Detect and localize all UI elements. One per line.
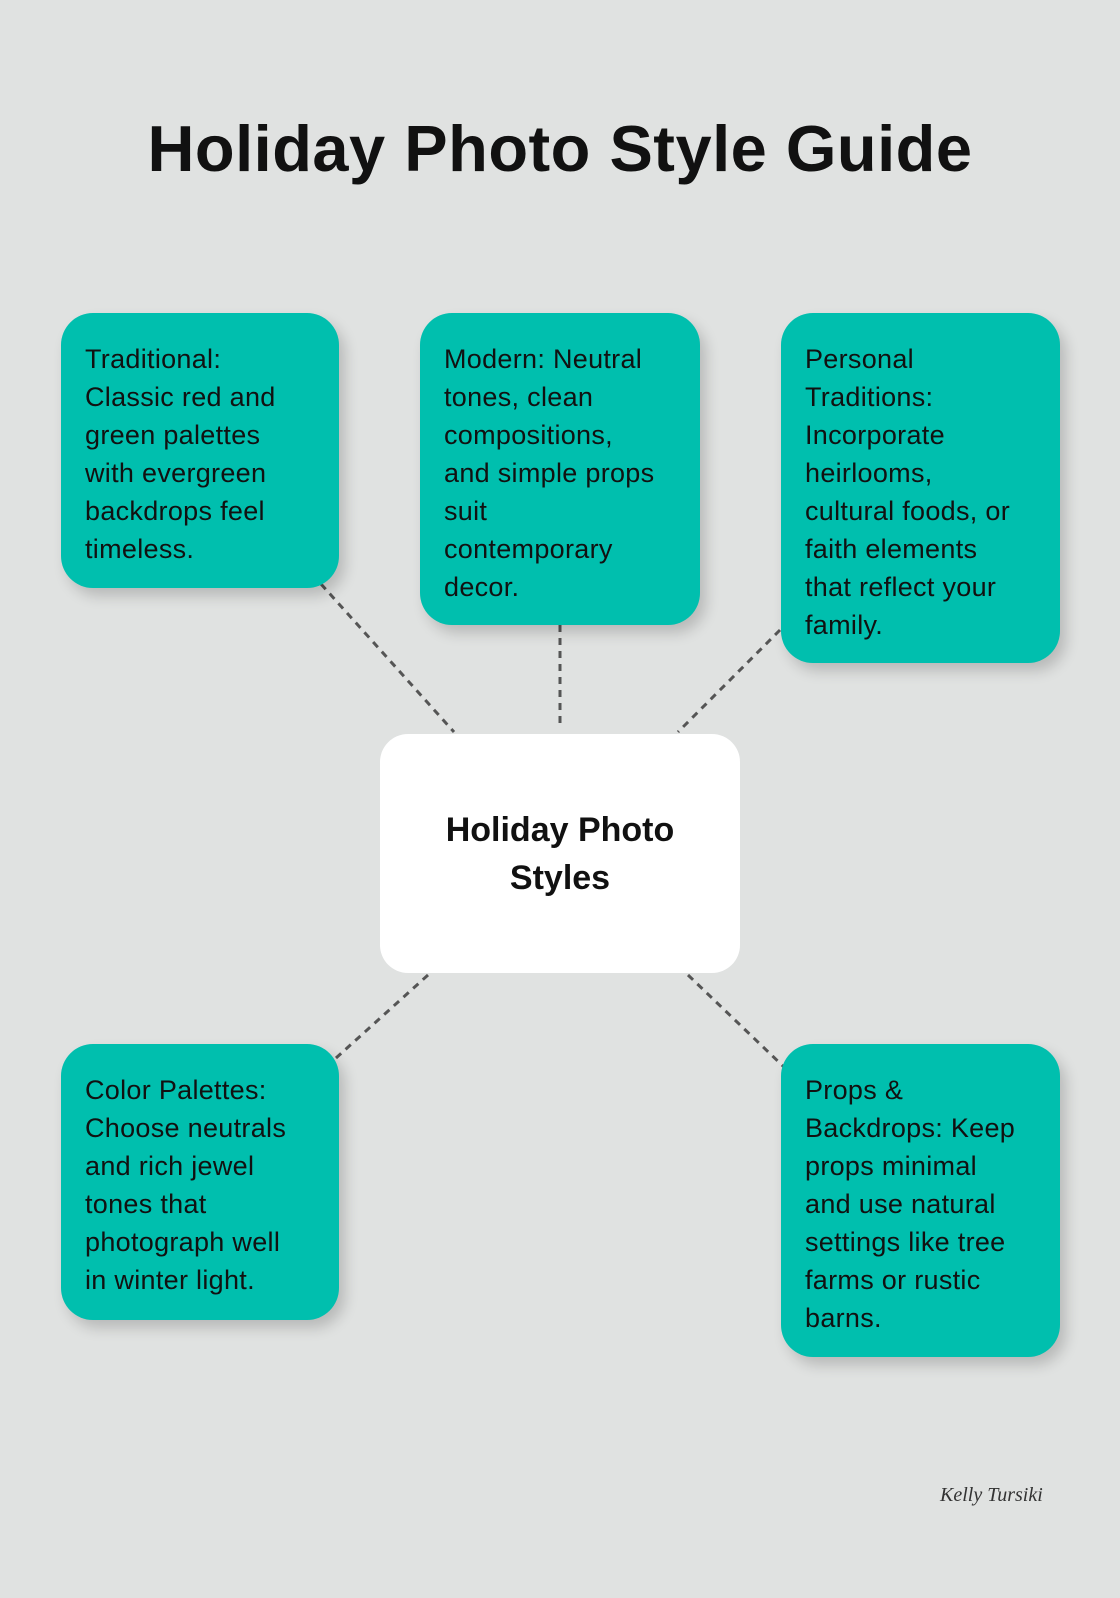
panel: props and backdrops: and use natural xyxy=(805,1189,996,1219)
title: Holiday Photo Style Guide xyxy=(147,112,973,185)
panel: props and backdrops: Props & xyxy=(805,1075,903,1105)
panel: personal traditions: Personal xyxy=(805,344,914,374)
panel: traditional: backdrops feel xyxy=(85,496,265,526)
panel: traditional: Traditional: xyxy=(85,344,221,374)
panel: personal traditions: family. xyxy=(805,610,883,640)
panel: personal traditions xyxy=(781,313,1060,663)
panel: modern xyxy=(420,313,700,625)
panel: personal traditions: Traditions: xyxy=(805,382,933,412)
panel: modern: and simple props xyxy=(444,458,654,488)
panel: color palettes: tones that xyxy=(85,1189,207,1219)
center node xyxy=(380,734,740,973)
panel: traditional: green palettes xyxy=(85,420,260,450)
panel: traditional: with evergreen xyxy=(85,458,266,488)
panel: props and backdrops: settings like tree xyxy=(805,1227,1006,1257)
panel: color palettes: and rich jewel xyxy=(85,1151,254,1181)
panel: props and backdrops: farms or rustic xyxy=(805,1265,981,1295)
panel: modern: contemporary xyxy=(444,534,613,564)
panel: color palettes: Choose neutrals xyxy=(85,1113,286,1143)
panel: modern: suit xyxy=(444,496,487,526)
panel: personal traditions: Incorporate xyxy=(805,420,945,450)
center node: Styles xyxy=(510,858,610,896)
panel: color palettes xyxy=(61,1044,339,1320)
panel: modern: Modern: Neutral xyxy=(444,344,642,374)
panel: personal traditions: heirlooms, xyxy=(805,458,933,488)
panel: props and backdrops: barns. xyxy=(805,1303,882,1333)
panel: traditional xyxy=(61,313,339,588)
panel: personal traditions: cultural foods, or xyxy=(805,496,1010,526)
panel: color palettes: Color Palettes: xyxy=(85,1075,267,1105)
panel: props and backdrops: props minimal xyxy=(805,1151,977,1181)
panel: modern: compositions, xyxy=(444,420,613,450)
panel: personal traditions: that reflect your xyxy=(805,572,996,602)
panel: modern: decor. xyxy=(444,572,519,602)
center node: Holiday Photo xyxy=(446,810,674,848)
panel: props and backdrops xyxy=(781,1044,1060,1357)
panel: color palettes: in winter light. xyxy=(85,1265,255,1295)
panel: personal traditions: faith elements xyxy=(805,534,977,564)
panel: color palettes: photograph well xyxy=(85,1227,280,1257)
panel: traditional: Classic red and xyxy=(85,382,276,412)
panel: traditional: timeless. xyxy=(85,534,194,564)
panel: modern: tones, clean xyxy=(444,382,593,412)
signature logo: Kelly Tursiki xyxy=(940,1484,1043,1506)
panel: props and backdrops: Backdrops: Keep xyxy=(805,1113,1015,1143)
